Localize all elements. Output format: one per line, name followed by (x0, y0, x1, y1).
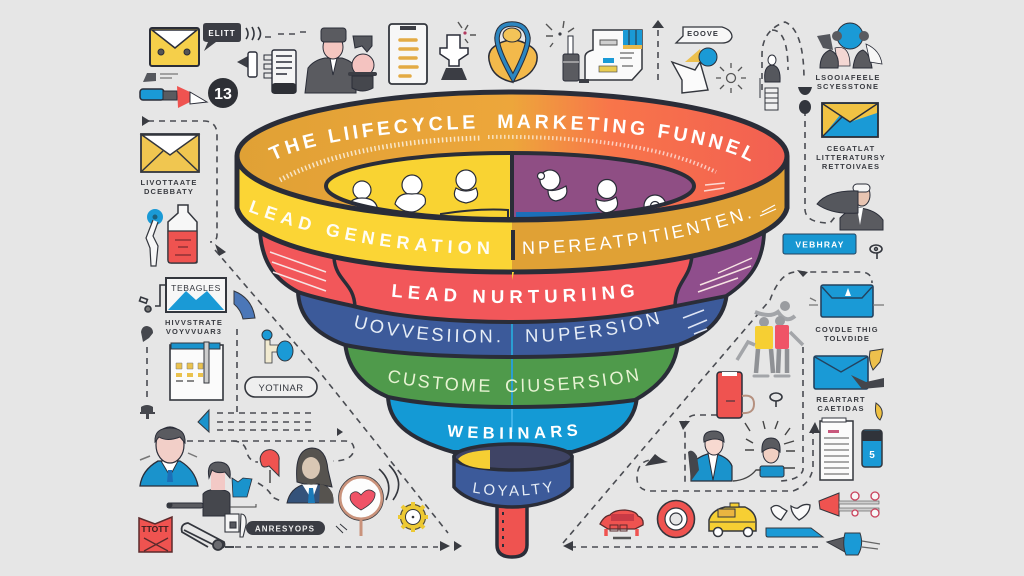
caption: covering (815, 325, 879, 343)
rim top surface: THE LIIFECYCLE MARKETING FUNNEL (268, 114, 751, 162)
pill: webinar (245, 377, 317, 397)
icon: red bottle (168, 205, 197, 263)
caption: literature (816, 144, 886, 171)
icon: blue wedge (234, 291, 255, 319)
icon: sound waves (246, 27, 260, 40)
caption: covering: TOLVDIDE (824, 334, 870, 343)
icon: sparks and luggage (546, 21, 579, 81)
tag: groove: EOOVE (687, 29, 719, 38)
caption: audience: LSOOIAFEELE (815, 73, 881, 82)
icon: blue phone: 5 (869, 450, 875, 461)
tier: conversion (296, 293, 728, 359)
icon: yellow envelope left (141, 134, 199, 172)
caption: audience (815, 73, 881, 91)
icon: calendar (170, 342, 223, 400)
icon: small chain (139, 285, 166, 312)
caption: literature: RETTOIVAES (822, 162, 880, 171)
tier: lead nurturing: LEAD NURTURIING (392, 284, 634, 304)
caption: investigate: HIVVSTRATE (165, 318, 223, 327)
icon: sun (716, 63, 746, 93)
speech bubble: elite: ELITT (208, 29, 236, 38)
icon: yellow-blue envelope (822, 103, 878, 137)
person: man with hat and crystal ball (305, 28, 377, 93)
pill: investors (246, 521, 325, 535)
icon: document and funnel tabs (237, 50, 296, 94)
tier: loyalty cup (452, 442, 574, 509)
funnel spout (497, 500, 527, 557)
tier: customer conversion: CUSTOME (388, 370, 490, 392)
icon: hearts (771, 504, 810, 520)
icon: list card (389, 24, 427, 84)
icon: head markers (140, 326, 155, 419)
icon: printer (579, 30, 642, 83)
caption: breakfast: CAETIDAS (817, 404, 865, 413)
icon: small pin (870, 245, 882, 259)
button: webinar: VEBHRAY (795, 240, 845, 250)
tier: lead nurturing (258, 234, 766, 324)
icon: gear (398, 502, 428, 532)
icon: dart (140, 86, 207, 108)
person: seated figure (760, 55, 780, 110)
icon: pin (770, 393, 782, 407)
tier: customer conversion: ClUSERSION (506, 368, 638, 392)
button: webinar (783, 234, 856, 254)
icon: crescent (876, 403, 882, 420)
icon: document (820, 418, 853, 480)
icon: pen (167, 502, 203, 508)
card: images (166, 278, 226, 312)
box: red (139, 517, 172, 552)
icon: heart sign (338, 476, 384, 536)
funnel opening with audience (326, 150, 696, 222)
icon: yellow taxi (709, 503, 756, 536)
icon: pointer markers (798, 87, 812, 114)
icon: audience group (817, 23, 882, 68)
caption: literature: LITTERATURSY (816, 153, 886, 162)
icon: paperclip (182, 523, 234, 550)
icon: white cards (225, 514, 246, 537)
icon: blue phone (862, 430, 882, 467)
box: red: TTOTT (141, 524, 169, 534)
card: images: TEBAGLES (171, 283, 221, 293)
person: man in blue shirt (140, 427, 198, 486)
badge: 13 (208, 78, 238, 108)
pill: webinar: YOTINAR (258, 383, 304, 394)
tier: customer conversion (344, 346, 680, 409)
icon: hand with blue dot (146, 209, 163, 266)
icon: red balloon (260, 450, 279, 483)
icon: blue bar (766, 528, 823, 537)
caption: investigate (165, 318, 223, 336)
icon: red mug (717, 372, 754, 418)
person: woman on phone (733, 421, 795, 481)
caption: covering: COVDLE THIG (815, 325, 879, 334)
icon: yellow collar (489, 24, 537, 82)
caption: lifecycle: LIVOTTAATE (141, 178, 197, 187)
icon: red tool with rings (819, 492, 879, 517)
people: two figures (737, 301, 803, 376)
icon: blue envelope (809, 285, 884, 317)
icon: signal arcs (336, 465, 399, 533)
tier: webinars (386, 398, 639, 454)
caption: breakfast (816, 395, 866, 413)
tier: conversion: UOVVESIION. (355, 315, 500, 342)
icon: blue flag (198, 410, 209, 432)
tier: rim band lead generation: NPEREATPITIENTEN. (523, 208, 751, 254)
tier: conversion: NUPERSION (526, 312, 660, 342)
caption: audience: SCYESSTONE (817, 82, 879, 91)
icon: plug (827, 533, 880, 555)
caption: investigate: VOYVVUAR3 (166, 327, 222, 336)
funnel (234, 90, 790, 559)
icon: blue key (262, 330, 293, 363)
tag: groove (676, 27, 732, 43)
icon: target (658, 500, 694, 538)
person: presenter with megaphone (817, 184, 883, 230)
rim top surface (234, 90, 790, 222)
tier: rim band lead generation: LEAD GENERATION (249, 200, 489, 254)
person: man in blue suit (688, 431, 732, 481)
icon: yellow envelope top left (150, 28, 199, 66)
tier: webinars: WEBIINARS (448, 424, 578, 439)
connector: dashed routes (142, 20, 872, 551)
person: woman with long hair (287, 448, 333, 503)
icon: paper bird (672, 48, 717, 93)
caption: lifecycle (141, 178, 197, 196)
caption: breakfast: REARTART (816, 395, 866, 404)
pill: investors: ANRESYOPS (255, 524, 315, 534)
icon: robot press (440, 22, 476, 80)
icon: small person note (143, 73, 178, 82)
speech bubble: elite (203, 23, 241, 51)
person: woman in black (203, 462, 256, 516)
tier: rim band lead generation (234, 156, 790, 280)
infographic canvas (138, 20, 885, 559)
icon: blue envelope with hand (814, 349, 884, 389)
caption: lifecycle: DCEBBATY (144, 187, 194, 196)
caption: literature: CEGATLAT (827, 144, 875, 153)
badge: 13: 13 (214, 86, 232, 103)
tier: loyalty cup: LOYALTY (473, 481, 552, 496)
icon: red car (600, 510, 643, 538)
